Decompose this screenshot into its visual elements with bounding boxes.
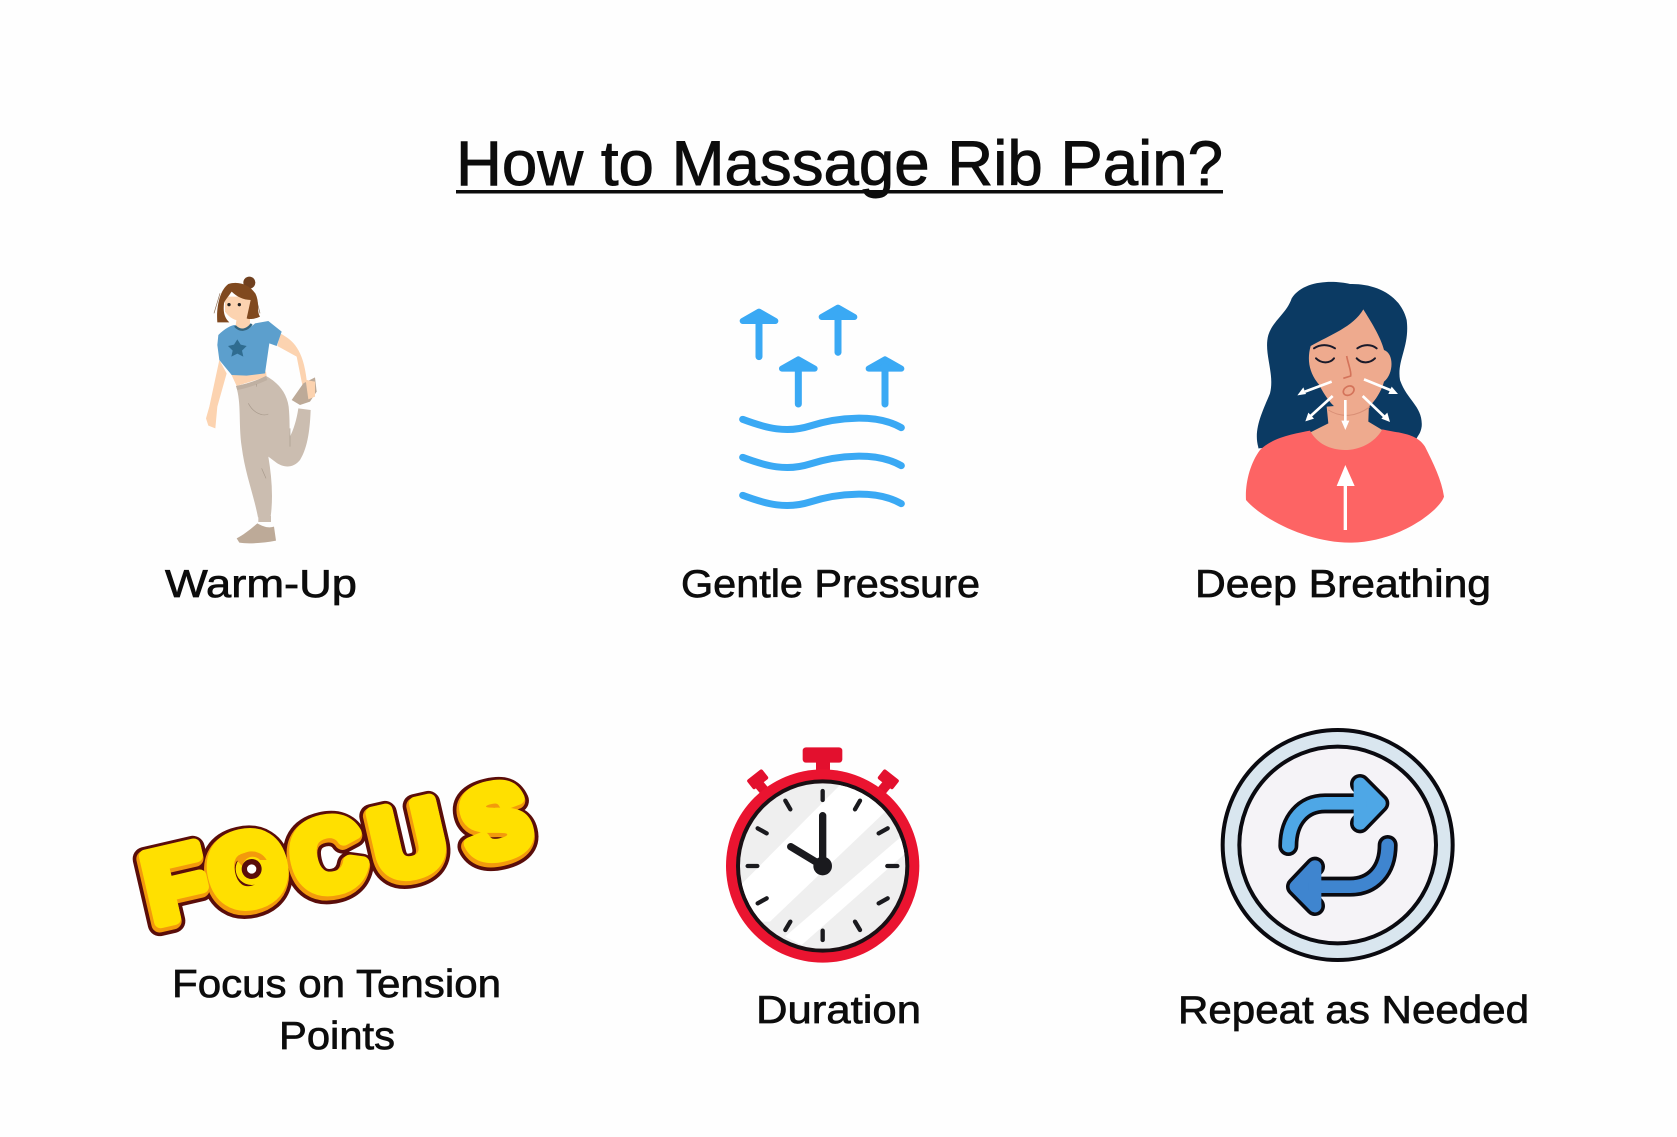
label: repeat as needed: Repeat as Needed <box>1178 989 1529 1032</box>
panel: repeat as needed <box>1178 730 1529 1032</box>
label: deep breathing: Deep Breathing <box>1195 563 1491 606</box>
panel: deep breathing <box>1195 282 1491 606</box>
icon: focus lettering: FOCUS <box>134 764 539 946</box>
icon: stopwatch <box>726 747 919 963</box>
label: focus on tension points <box>172 963 501 1058</box>
panel: duration <box>726 747 921 1032</box>
icon: repeat arrows <box>1223 730 1453 960</box>
panel: warm-up <box>165 277 357 606</box>
label: warm-up: Warm-Up <box>165 563 357 606</box>
icon: woman breathing <box>1246 282 1444 543</box>
label: gentle pressure: Gentle Pressure <box>681 563 980 606</box>
icon: focus lettering: FOCUS <box>135 761 540 943</box>
icon: focus lettering: FOCUS <box>134 764 539 946</box>
icon: woman stretching <box>206 277 317 543</box>
icon: arrows and waves <box>743 308 901 506</box>
label: focus on tension points: Points <box>279 1015 395 1058</box>
label: focus on tension points: Focus on Tension <box>172 963 501 1006</box>
label: duration: Duration <box>756 989 921 1032</box>
title: How to Massage Rib Pain? <box>456 129 1223 199</box>
panel: gentle pressure <box>681 308 980 606</box>
panel: focus on tension points <box>134 761 540 1058</box>
